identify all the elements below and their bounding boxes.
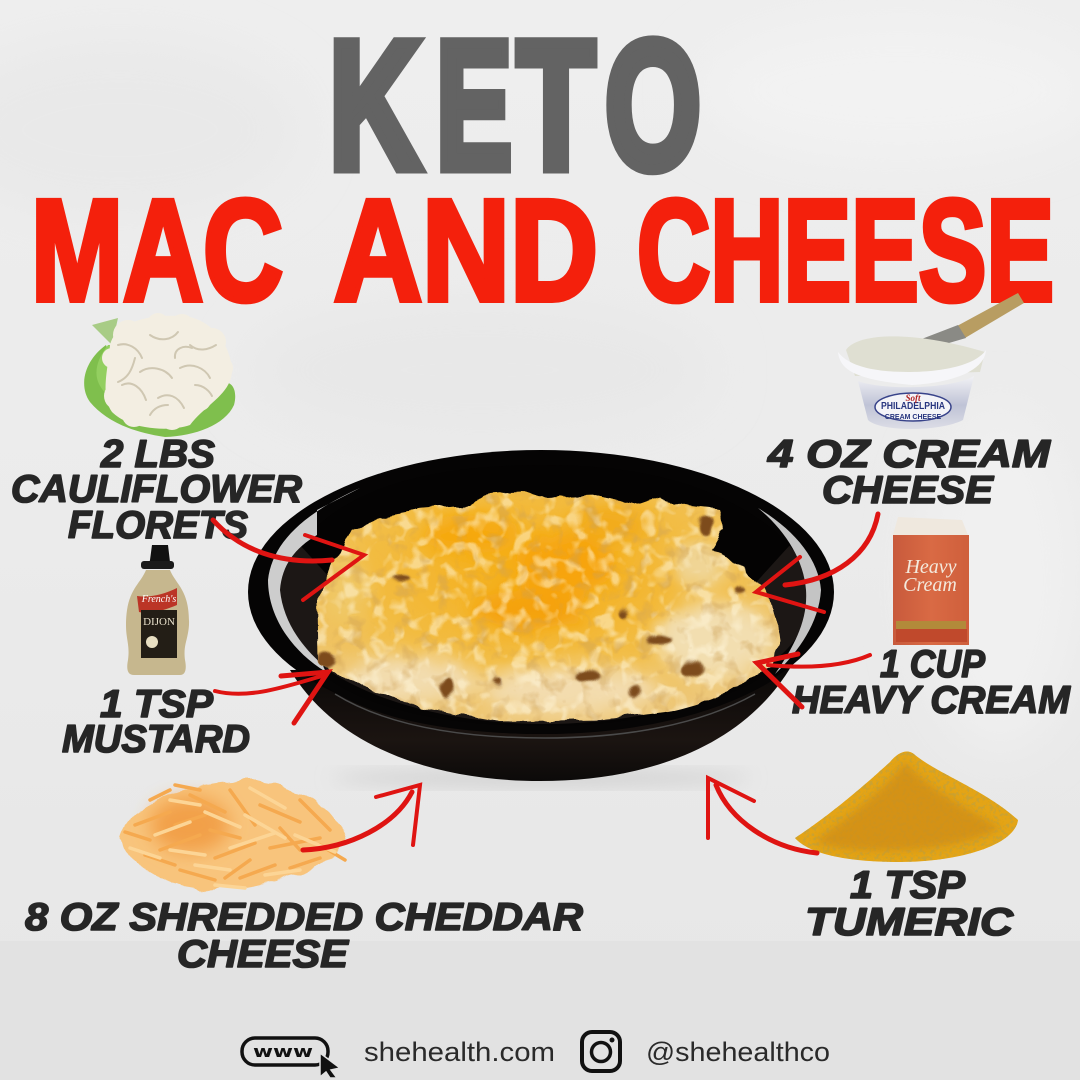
title: MAC AND CHEESE: MAC	[31, 170, 283, 331]
ingredient: mustard bottle: DIJON	[143, 616, 175, 628]
label: 1 cup heavy cream	[792, 643, 1071, 722]
label: 1 tsp tumeric	[805, 864, 1014, 944]
label: 2 lbs cauliflower florets: CAULIFLOWER	[11, 468, 302, 511]
arrow: tumeric to bowl	[708, 778, 817, 853]
footer: website	[242, 1037, 555, 1078]
ingredient: cream cheese tub: CREAM CHEESE	[885, 414, 942, 421]
ingredient: mustard bottle: French's	[141, 594, 176, 605]
title: MAC AND CHEESE: AND	[334, 170, 598, 331]
ingredient: mustard bottle	[126, 545, 189, 675]
label: 1 tsp tumeric: 1 TSP	[850, 864, 966, 907]
label: 8 oz shredded cheddar cheese: CHEESE	[177, 933, 349, 976]
footer: instagram: @shehealthco	[646, 1037, 830, 1067]
label: 1 tsp mustard	[62, 683, 250, 761]
ingredient: shredded cheddar	[120, 780, 345, 890]
icon: www cursor	[242, 1038, 340, 1078]
bowl of mac and cheese	[248, 450, 834, 786]
label: 2 lbs cauliflower florets: 2 LBS	[100, 433, 215, 476]
ingredient: heavy cream carton	[893, 517, 969, 645]
label: 1 tsp tumeric: TUMERIC	[805, 901, 1014, 944]
label: 4 oz cream cheese: CHEESE	[822, 469, 994, 512]
bowl front lip	[318, 676, 772, 730]
cheese filling	[316, 491, 780, 723]
label: 1 cup heavy cream: 1 CUP	[880, 643, 986, 686]
arrow: cream cheese to bowl	[756, 514, 878, 612]
icon: instagram	[582, 1032, 620, 1071]
ingredient: heavy cream carton: Heavy	[904, 556, 957, 578]
ingredient: cream cheese tub: PHILADELPHIA	[881, 401, 945, 412]
label: 4 oz cream cheese	[767, 433, 1052, 512]
footer: website: shehealth.com	[364, 1037, 555, 1067]
label: 2 lbs cauliflower florets	[11, 433, 302, 547]
bowl rim	[248, 450, 834, 734]
title: KETO: K	[329, 3, 421, 207]
title: KETO	[329, 3, 701, 207]
label: 1 cup heavy cream: HEAVY CREAM	[792, 679, 1071, 722]
ingredient: heavy cream carton: Cream	[903, 574, 957, 596]
arrow: mustard to bowl	[215, 672, 328, 723]
ingredient: cream cheese tub: Soft	[905, 393, 921, 403]
ingredient: cauliflower	[84, 313, 235, 437]
title: MAC AND CHEESE	[31, 170, 1054, 331]
silver rim highlights	[268, 488, 360, 672]
title: KETO: E	[436, 3, 512, 207]
title: KETO: T	[517, 3, 595, 207]
ingredient: turmeric powder	[795, 751, 1018, 862]
label: 4 oz cream cheese: 4 OZ CREAM	[767, 433, 1052, 476]
bowl base	[290, 665, 792, 781]
label: 2 lbs cauliflower florets: FLORETS	[68, 504, 248, 547]
arrow: cheddar to bowl	[303, 785, 420, 850]
title: KETO: O	[605, 3, 701, 207]
label: 8 oz shredded cheddar cheese	[25, 896, 583, 976]
ingredient: cream cheese tub	[838, 293, 1024, 429]
arrow: heavy cream to bowl	[757, 654, 870, 707]
footer: instagram	[582, 1032, 830, 1071]
arrow: cauliflower to bowl	[213, 520, 364, 600]
label: 1 tsp mustard: MUSTARD	[62, 718, 250, 761]
icon: www cursor: www	[253, 1042, 313, 1061]
label: 1 tsp mustard: 1 TSP	[100, 683, 214, 726]
label: 8 oz shredded cheddar cheese: 8 OZ SHREDDED CHEDDAR	[25, 896, 583, 939]
